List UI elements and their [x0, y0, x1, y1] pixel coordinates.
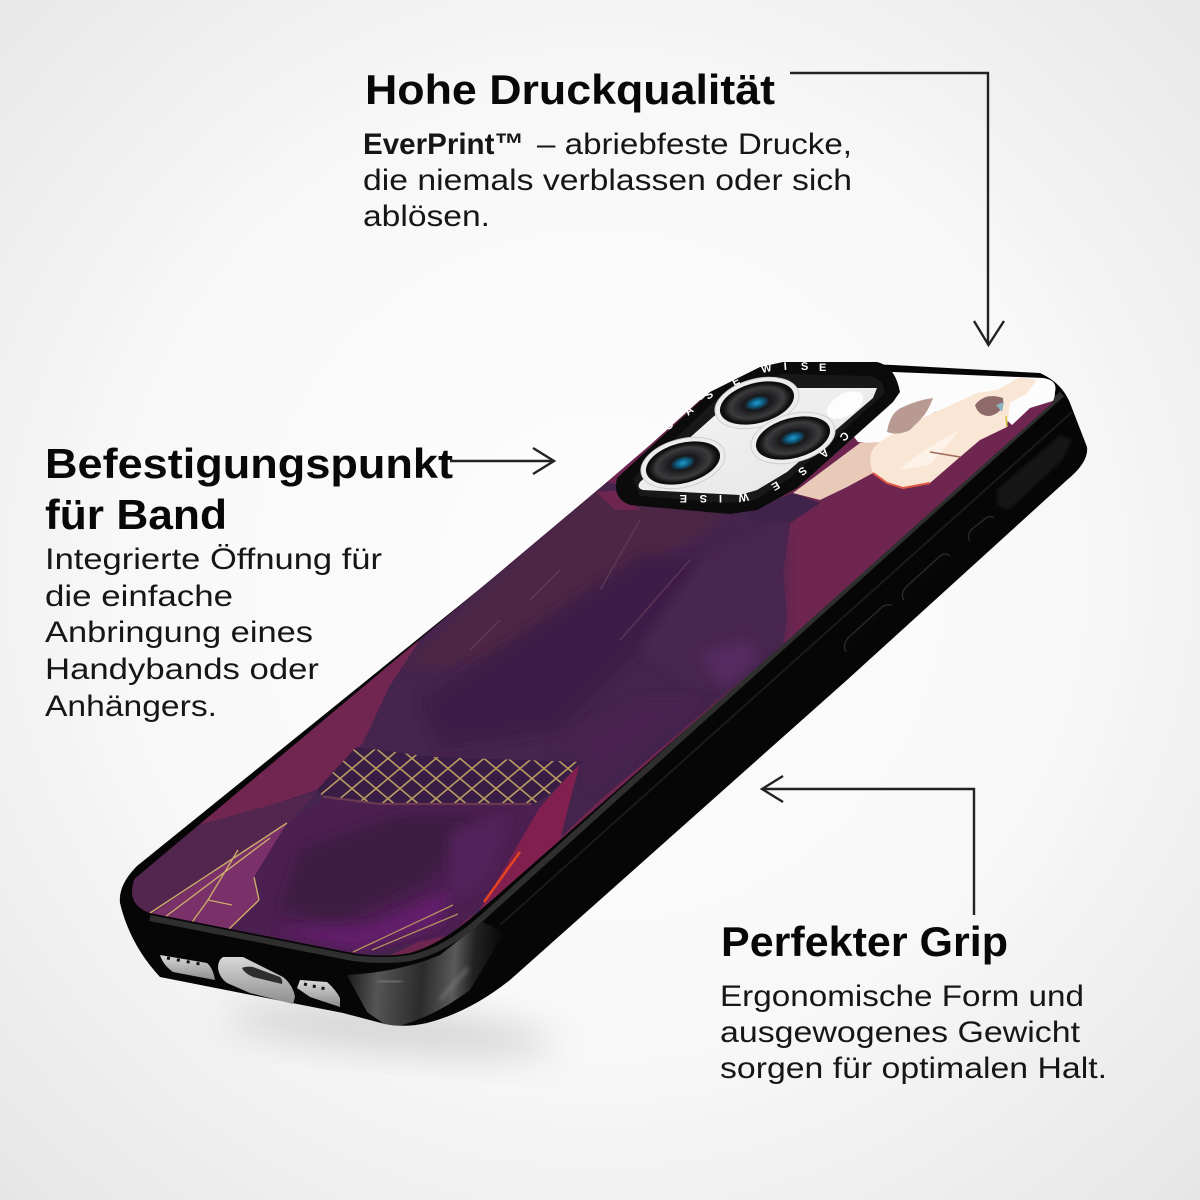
bottom left speaker — [160, 955, 215, 980]
case rim along the right edge — [150, 394, 1062, 960]
arrow: to phone side — [762, 776, 974, 915]
heading: für Band — [45, 491, 227, 538]
body text: Handybands oder — [45, 653, 319, 686]
heading: Befestigungspunkt — [45, 440, 453, 487]
sash gold net — [320, 749, 578, 805]
heading: Hohe Druckqualität — [365, 66, 775, 113]
dark streaked cloth lower left — [125, 792, 317, 915]
body text: die niemals verblassen oder sich — [363, 164, 852, 197]
lens right — [745, 404, 841, 472]
heading: Perfekter Grip — [721, 918, 1008, 965]
robe — [120, 480, 820, 965]
ear — [887, 398, 933, 434]
side buttons — [844, 516, 994, 652]
body text — [363, 128, 852, 233]
brand text on camera ring: CASEWISE — [680, 429, 851, 504]
charging port — [218, 957, 295, 1004]
arrow: to top of phone — [790, 73, 1004, 345]
body text — [45, 543, 382, 723]
arrow: to strap attachment — [450, 448, 554, 474]
brand text on camera ring — [662, 361, 851, 504]
orange highlight — [484, 852, 520, 902]
camera ring shading — [633, 374, 884, 503]
brand text on camera ring: CASEWISE — [662, 361, 826, 433]
lower robe shadows and highlights — [270, 815, 510, 950]
lower robe — [232, 918, 468, 954]
body text: Integrierte Öffnung für — [45, 543, 382, 576]
side button lump — [997, 435, 1072, 510]
body text: ausgewogenes Gewicht — [720, 1016, 1081, 1049]
upper left plum corner beside the camera — [596, 490, 640, 510]
glossy corner of case — [347, 922, 505, 1028]
arm — [793, 442, 880, 500]
body text: die einfache — [45, 580, 233, 613]
case rim groove — [500, 412, 1072, 925]
sash — [317, 747, 582, 805]
phone drop shadow — [224, 996, 556, 1064]
robe folds — [428, 490, 790, 742]
camera glass — [639, 385, 877, 495]
gold trim lower right — [353, 905, 458, 952]
horse head — [870, 377, 1037, 488]
body text: sorgen für optimalen Halt. — [720, 1052, 1107, 1085]
flash highlight — [822, 385, 868, 425]
body text: ablösen. — [363, 200, 490, 233]
body text: Ergonomische Form und — [720, 980, 1084, 1013]
plum background at left edge — [120, 640, 420, 885]
embroidered panel lower left — [150, 823, 287, 930]
callout: Hohe Druckqualität — [363, 66, 852, 233]
lens top — [709, 369, 805, 437]
body text: Anbringung eines — [45, 616, 313, 649]
camera bump — [616, 361, 900, 514]
callout: Perfekter Grip — [720, 918, 1107, 1085]
body text — [720, 980, 1107, 1085]
phone illustration — [100, 350, 1100, 1028]
bottom right speaker — [297, 980, 340, 1007]
body text: – abriebfeste Drucke, — [537, 128, 852, 161]
body text: EverPrint™ — [363, 128, 524, 161]
phone case body — [120, 362, 1087, 1026]
yellow trim — [1006, 416, 1007, 427]
eye — [975, 396, 1003, 416]
heading — [45, 440, 453, 538]
sleeve cuff — [790, 493, 820, 523]
callout: Befestigungspunkt für Band — [45, 440, 453, 723]
lens left — [635, 429, 731, 497]
red cloth accent — [477, 763, 580, 915]
printed artwork on the back — [132, 372, 1056, 956]
white area at top of print — [854, 372, 1056, 443]
body text: Anhängers. — [45, 690, 217, 723]
